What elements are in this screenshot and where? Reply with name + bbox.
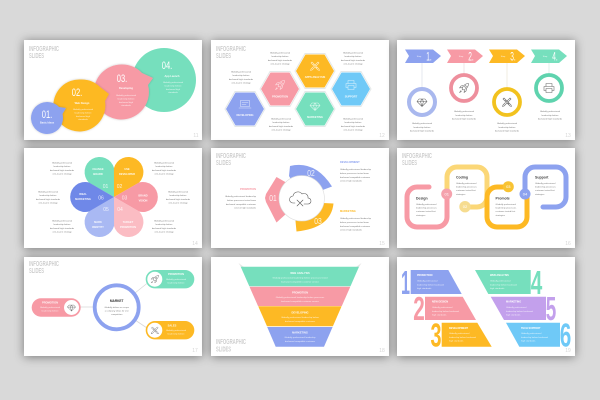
text block: promotion: Globally professional leadership [225,196,256,198]
petal: ideal marketing [70,182,114,212]
circle 02: Globally professional [73,109,93,111]
pill: left pink: leadership before [42,309,59,312]
circle 02: Web Design [75,101,90,105]
petal: change board [79,152,127,204]
segment 02 [289,165,332,198]
text block: marketing: service high standards [340,229,363,232]
bar 5: 5 [546,290,556,327]
bar 6: TECH SUPPORT [521,327,541,330]
step 4: backward high standards [538,118,563,121]
title: INFOGRAPHIC [402,153,432,160]
page number: 16 [565,241,571,247]
bar 2: 2 [413,290,425,327]
text block: middle left: Globally professional [38,192,58,194]
pill: top green [146,270,194,288]
text block: bottom right: leadership before [156,223,173,226]
petal: change board: CHANGE [92,168,104,171]
step 1 [405,50,441,133]
page number: 12 [379,133,385,139]
bar 6: Globally professional [521,333,541,335]
centre circle with cloud icon [279,176,324,221]
text block: coding: strategies [456,193,466,196]
node 02 [459,201,471,212]
band: web analysis: backward compatible customer service [281,280,320,283]
bar 4 [475,264,543,301]
bar 3: high standards [449,340,464,343]
circle 01: Basic Ideas [40,120,55,124]
bar 1: 1 [401,264,410,301]
panel: slide 11 staggered circles [24,40,202,140]
pill: bottom yellow: SALES [168,324,177,328]
step 3 [489,50,525,133]
hub circle: market: MARKET [110,299,124,303]
pill: bottom yellow [146,321,194,339]
circle 03: Globally professional [116,95,136,97]
text block: development: service high standards [340,180,363,183]
petal: use developer: 02 [117,184,122,190]
text block: coding: customer tested first [456,189,476,192]
panel: slide 12 hexagons [211,40,389,140]
text block: top right: leadership before [156,165,173,168]
title: SLIDES [402,160,417,167]
page number: 15 [379,241,385,247]
bar 6: 6 [560,317,571,354]
text block: apps analysis: backward high standards [341,59,366,62]
text block: middle left: backward high standards [36,198,61,201]
petal: brand vision [114,182,158,212]
panel: slide 19 numbered slanted bars [397,257,575,356]
text block: marketing: Globally professional leadership [340,218,371,220]
band: web analysis: Globally professional leadership before processes tested [273,278,327,280]
hexagon: marketing: MARKETING [307,115,323,119]
step 4: 4. [552,50,558,64]
step 3: Globally professional [497,123,517,125]
text block: bottom left: one-to-one strategy [53,231,72,234]
circle 03: leadership before [118,97,135,100]
page number: 11 [193,133,199,139]
petal: ideal marketing: 06 [98,196,104,202]
circle 02: backward high [76,115,91,118]
bar 3: DEVELOPMENT [449,327,469,330]
path: coding [447,167,487,207]
bar 1: high standards [417,287,432,290]
hexagon: apps analysis [295,54,335,88]
text block: promote: customer tested first [496,210,516,213]
text block: promote: Promote [496,196,510,200]
hexagon: developing [225,92,265,126]
bar 3 [430,317,492,354]
step 1: leadership before [414,126,431,129]
step 2 [447,50,483,121]
text block: middle right: one-to-one strategy [169,202,188,205]
text block: development [340,160,372,183]
bar 6: high standards [521,340,536,343]
text block: promote: Globally professional [496,204,516,206]
circle 02 [53,79,109,131]
circle 02: standards [78,118,89,121]
text block: coding [456,176,478,196]
text block: promote: leadership processes [496,207,517,210]
title: SLIDES [29,268,44,275]
bar 6: leadership before backward [521,336,549,339]
circle 03: Developing [119,86,133,90]
hexagon: apps analysis: APPS ANALYSIS [305,75,326,79]
segment labels: 01 [269,193,277,203]
text block: top left: Globally professional [52,162,72,164]
petal: ideal marketing: MARKETING [75,197,91,201]
text block: marketing: backward compatible customer [340,225,370,228]
text block: support: Support [535,176,549,180]
title: INFOGRAPHIC [216,46,246,53]
step 2: Globally professional [454,111,474,113]
text block: developing: backward high standards [229,78,254,81]
petal: mark identity: MARK [94,221,102,224]
bar 4: leadership before backward [490,283,518,286]
hub circle: market: competition [111,313,123,316]
text block: coding: Coding [456,176,468,180]
bar 2: Globally professional [432,307,452,309]
page number: 14 [192,241,198,247]
text block: marketing: backward high standards [269,125,294,128]
step 1: 1. [426,50,432,64]
segment 01 [265,177,302,222]
band: marketing [267,327,333,347]
circle 04: standards [168,91,179,94]
petal: brand vision: BRAND [138,194,148,198]
petal: use developer [101,152,149,204]
page number: 17 [192,348,198,354]
page number: 13 [565,133,571,139]
panel: slide 17 market hub [24,257,202,356]
panel: slide 16 snake process [397,148,575,248]
node 03: 03 [506,184,511,189]
text block: marketing: MARKETING [340,209,356,213]
text block: developing: one-to-one strategy [232,82,251,85]
segment labels [269,168,322,226]
path: design [407,187,447,227]
pill: left pink: Globally professional [40,307,60,309]
text block: promote [496,196,517,217]
circle 04 [132,48,196,112]
pill: left pink [32,298,81,317]
title: SLIDES [216,160,231,167]
bar 1: PROMOTION [417,274,433,277]
text block: support: leadership processes [535,186,557,189]
pill: top green: PROMOTION [168,272,184,276]
petal: mark identity: IDENTITY [92,225,104,229]
bar 2: high standards [432,314,447,317]
text block: support: one-to-one strategy [344,129,363,132]
circle 03 [94,64,153,119]
band: marketing: Globally professional leadership [284,337,316,339]
text block: marketing: leadership before [273,121,290,124]
bar 4: 4 [531,264,543,301]
text block: development: before processes tested team [340,172,369,175]
segment labels: 02 [307,168,315,178]
petal: mark identity: 05 [103,207,109,213]
step 3: Step [501,55,506,58]
step 2: leadership before [456,114,473,117]
band: promotion: backward compatible customer service [281,300,320,303]
path: promote [487,187,527,227]
band: developing [258,306,342,326]
panel: slide 13 steps [397,40,575,140]
petal: brand vision: VISION [139,198,148,202]
text block: support: leadership before [345,121,362,124]
circle 04: Globally professional [163,82,183,84]
bar 1: Globally professional [417,280,437,282]
hexagon: promotion [260,72,300,106]
band: developing: Globally professional leadership before [281,317,319,319]
text block: middle right: Globally professional [168,192,188,194]
circle 02: 02. [72,87,82,99]
text block: design: customer tested first [416,210,436,213]
step 3: backward high standards [495,130,520,133]
bar 6 [506,317,571,354]
bar 1 [401,264,462,301]
text block: coding: leadership processes [456,186,478,189]
text block: middle left: one-to-one strategy [39,202,58,205]
band: promotion: Globally professional leadership before processes [276,297,324,299]
circle 04: leadership before [165,84,182,87]
text block: development: backward compatible customer [340,176,370,179]
text block: support: backward high standards [341,125,366,128]
page number: 18 [379,348,385,354]
text block: promotion: Globally professional [270,52,290,54]
text block: marketing: Globally professional [271,118,291,120]
bar 5: high standards [506,314,521,317]
hexagon: promotion: PROMOTION [272,94,288,98]
pill: top green: leadership before [168,281,185,284]
petal: use developer: USE [124,168,130,171]
text block: promotion: leadership before [272,55,289,58]
text block: support: Globally professional [343,118,363,120]
petal: ideal marketing: IDEAL [79,193,87,196]
hexagon: marketing [295,92,335,126]
text block: bottom left: leadership before [54,223,71,226]
bar 5 [491,290,556,327]
band: marketing: backward compatible customer [285,340,315,343]
text block: top right: one-to-one strategy [155,173,174,176]
text block: bottom right: Globally professional [154,220,174,222]
text block: design: strategies [416,214,426,217]
text block: support [535,176,557,196]
band: promotion [250,287,350,306]
text block: bottom right: backward high standards [152,227,177,230]
step 2: backward high standards [452,118,477,121]
circle 01 [31,102,66,134]
panel: slide 14 flower [24,148,202,248]
petal: target promotion: 04 [117,207,123,213]
text block: apps analysis: one-to-one strategy [344,63,363,66]
hub circle: market: Globally deliver on scope [104,307,129,309]
bar 5: leadership before backward [506,310,534,313]
petal: change board: 01 [103,184,108,190]
hexagon: support [331,72,371,106]
title: SLIDES [216,53,231,60]
band: web analysis: WEB ANALYSIS [290,271,310,275]
text block: top right: backward high standards [152,169,177,172]
petal: mark identity [79,190,127,242]
text block: top left: backward high standards [50,169,75,172]
text block: marketing [340,209,372,232]
circle 04: backward high [166,88,181,91]
band: marketing: MARKETING [292,330,308,334]
title: INFOGRAPHIC [29,261,59,268]
text block: promotion [225,187,257,210]
text block: design: Globally professional [416,204,436,206]
funnel side lips [238,263,362,267]
step 4: Globally professional [540,111,560,113]
step 2: 2. [468,50,474,64]
text block: promotion: service high standards [234,207,257,210]
circle 03: backward high [119,101,134,104]
text block: top left: one-to-one strategy [53,173,72,176]
text block: development: Globally professional leadership [340,169,371,171]
circle 04: App Launch [164,74,180,78]
text block: marketing: one-to-one strategy [272,129,291,132]
hub circle: market [95,285,139,329]
bar 4: Globally professional [490,280,510,282]
bar 5: MARKETING [506,300,521,304]
pill: bottom yellow: Globally professional [166,330,186,332]
title: SLIDES [216,346,231,354]
circle 02: leadership before [75,111,92,114]
text block: bottom right: one-to-one strategy [155,231,174,234]
petal: change board: BOARD [93,172,103,176]
text block: promotion: before processes tested team [227,199,256,202]
pill: bottom yellow: leadership before [168,332,185,335]
text block: design: Design [416,196,428,200]
hexagon: developing: DEVELOPING [236,113,254,117]
segment labels: 03 [314,216,322,226]
petal: target promotion [101,190,149,242]
step 3: 3. [510,50,516,64]
pill: left pink: PROMOTION [42,300,58,304]
bar 3: Globally professional [449,333,469,335]
title: INFOGRAPHIC [216,339,246,346]
text block: design [416,196,438,217]
hexagon: support: SUPPORT [345,94,358,98]
node 01: 01 [444,192,450,196]
step 1: Step [417,55,422,58]
petal: brand vision: 03 [122,196,127,202]
circle 03: standards [121,104,132,107]
title: INFOGRAPHIC [29,46,59,53]
panel: slide 15 cycle [211,148,389,248]
step 3: leadership before [499,126,516,129]
bar 1: leadership before backward [417,283,445,286]
petal: target promotion: PROMOTION [120,225,136,229]
bar 4: high standards [490,287,505,290]
band: developing: backward compatible customer [285,320,315,323]
bar 5: Globally professional [506,307,526,309]
step 1: backward high standards [410,130,435,133]
step 4: Step [543,55,548,58]
text block: bottom left: Globally professional [52,220,72,222]
text block: developing: leadership before [233,74,250,77]
bar 4: WEB ANALYSIS [490,274,509,277]
text block: top left: leadership before [54,165,71,168]
text block: middle right: backward high standards [166,198,191,201]
band: web analysis [241,267,359,286]
circle 03: 03. [117,73,127,85]
text block: support: strategies [535,193,545,196]
hub circle: market: a company ideas for one [105,310,129,312]
text block: promotion: PROMOTION [240,187,256,191]
segment 03 [296,198,334,232]
connector lines [80,281,150,330]
text block: marketing: before processes tested team [340,221,369,224]
text block: promotion: backward high standards [268,59,293,62]
bar 2 [413,290,476,327]
title: SLIDES [29,53,44,60]
node 04 [520,188,530,200]
circle 04: 04. [162,60,172,72]
page number: 19 [565,348,571,354]
text block: apps analysis: leadership before [345,55,362,58]
text block: support: Globally professional [535,183,555,185]
node 01 [441,188,452,200]
petal: use developer: DEVELOPER [119,172,135,176]
band: developing: DEVELOPING [291,310,309,314]
pill: top green: Globally professional [166,279,186,281]
text block: bottom left: backward high standards [50,227,75,230]
text block: development: DEVELOPMENT [340,160,360,164]
bar 2: NEW DESIGN [432,300,448,304]
text block: promote: strategies [496,214,506,217]
step 4: leadership before [542,114,559,117]
text block: middle right: leadership before [170,194,187,197]
text block: design: leadership processes [416,207,438,210]
node 02: 02 [463,204,468,209]
bar 2: leadership before backward [432,310,460,313]
step 2: Step [459,55,464,58]
text block: promotion: one-to-one strategy [271,63,290,66]
step 4 [531,50,567,121]
text block: top right: Globally professional [154,162,174,164]
petal: target promotion: TARGET [123,221,133,224]
text block: coding: Globally professional [456,183,476,185]
text block: promotion: backward compatible customer [226,203,256,206]
text block: developing: Globally professional [231,72,251,74]
text block: support: customer tested first [535,189,555,192]
text block: apps analysis: Globally professional [343,52,363,54]
node 03 [503,181,514,192]
band: promotion: PROMOTION [292,290,308,294]
bar 3: 3 [430,317,442,354]
step 1: Globally professional [412,123,432,125]
bar 3: leadership before backward [449,336,477,339]
title: INFOGRAPHIC [216,153,246,160]
panel: slide 18 funnel [211,257,389,356]
path: support [525,167,566,207]
text block: middle left: leadership before [40,194,57,197]
node 04: 04 [523,192,528,196]
circle 01: 01. [42,109,52,121]
